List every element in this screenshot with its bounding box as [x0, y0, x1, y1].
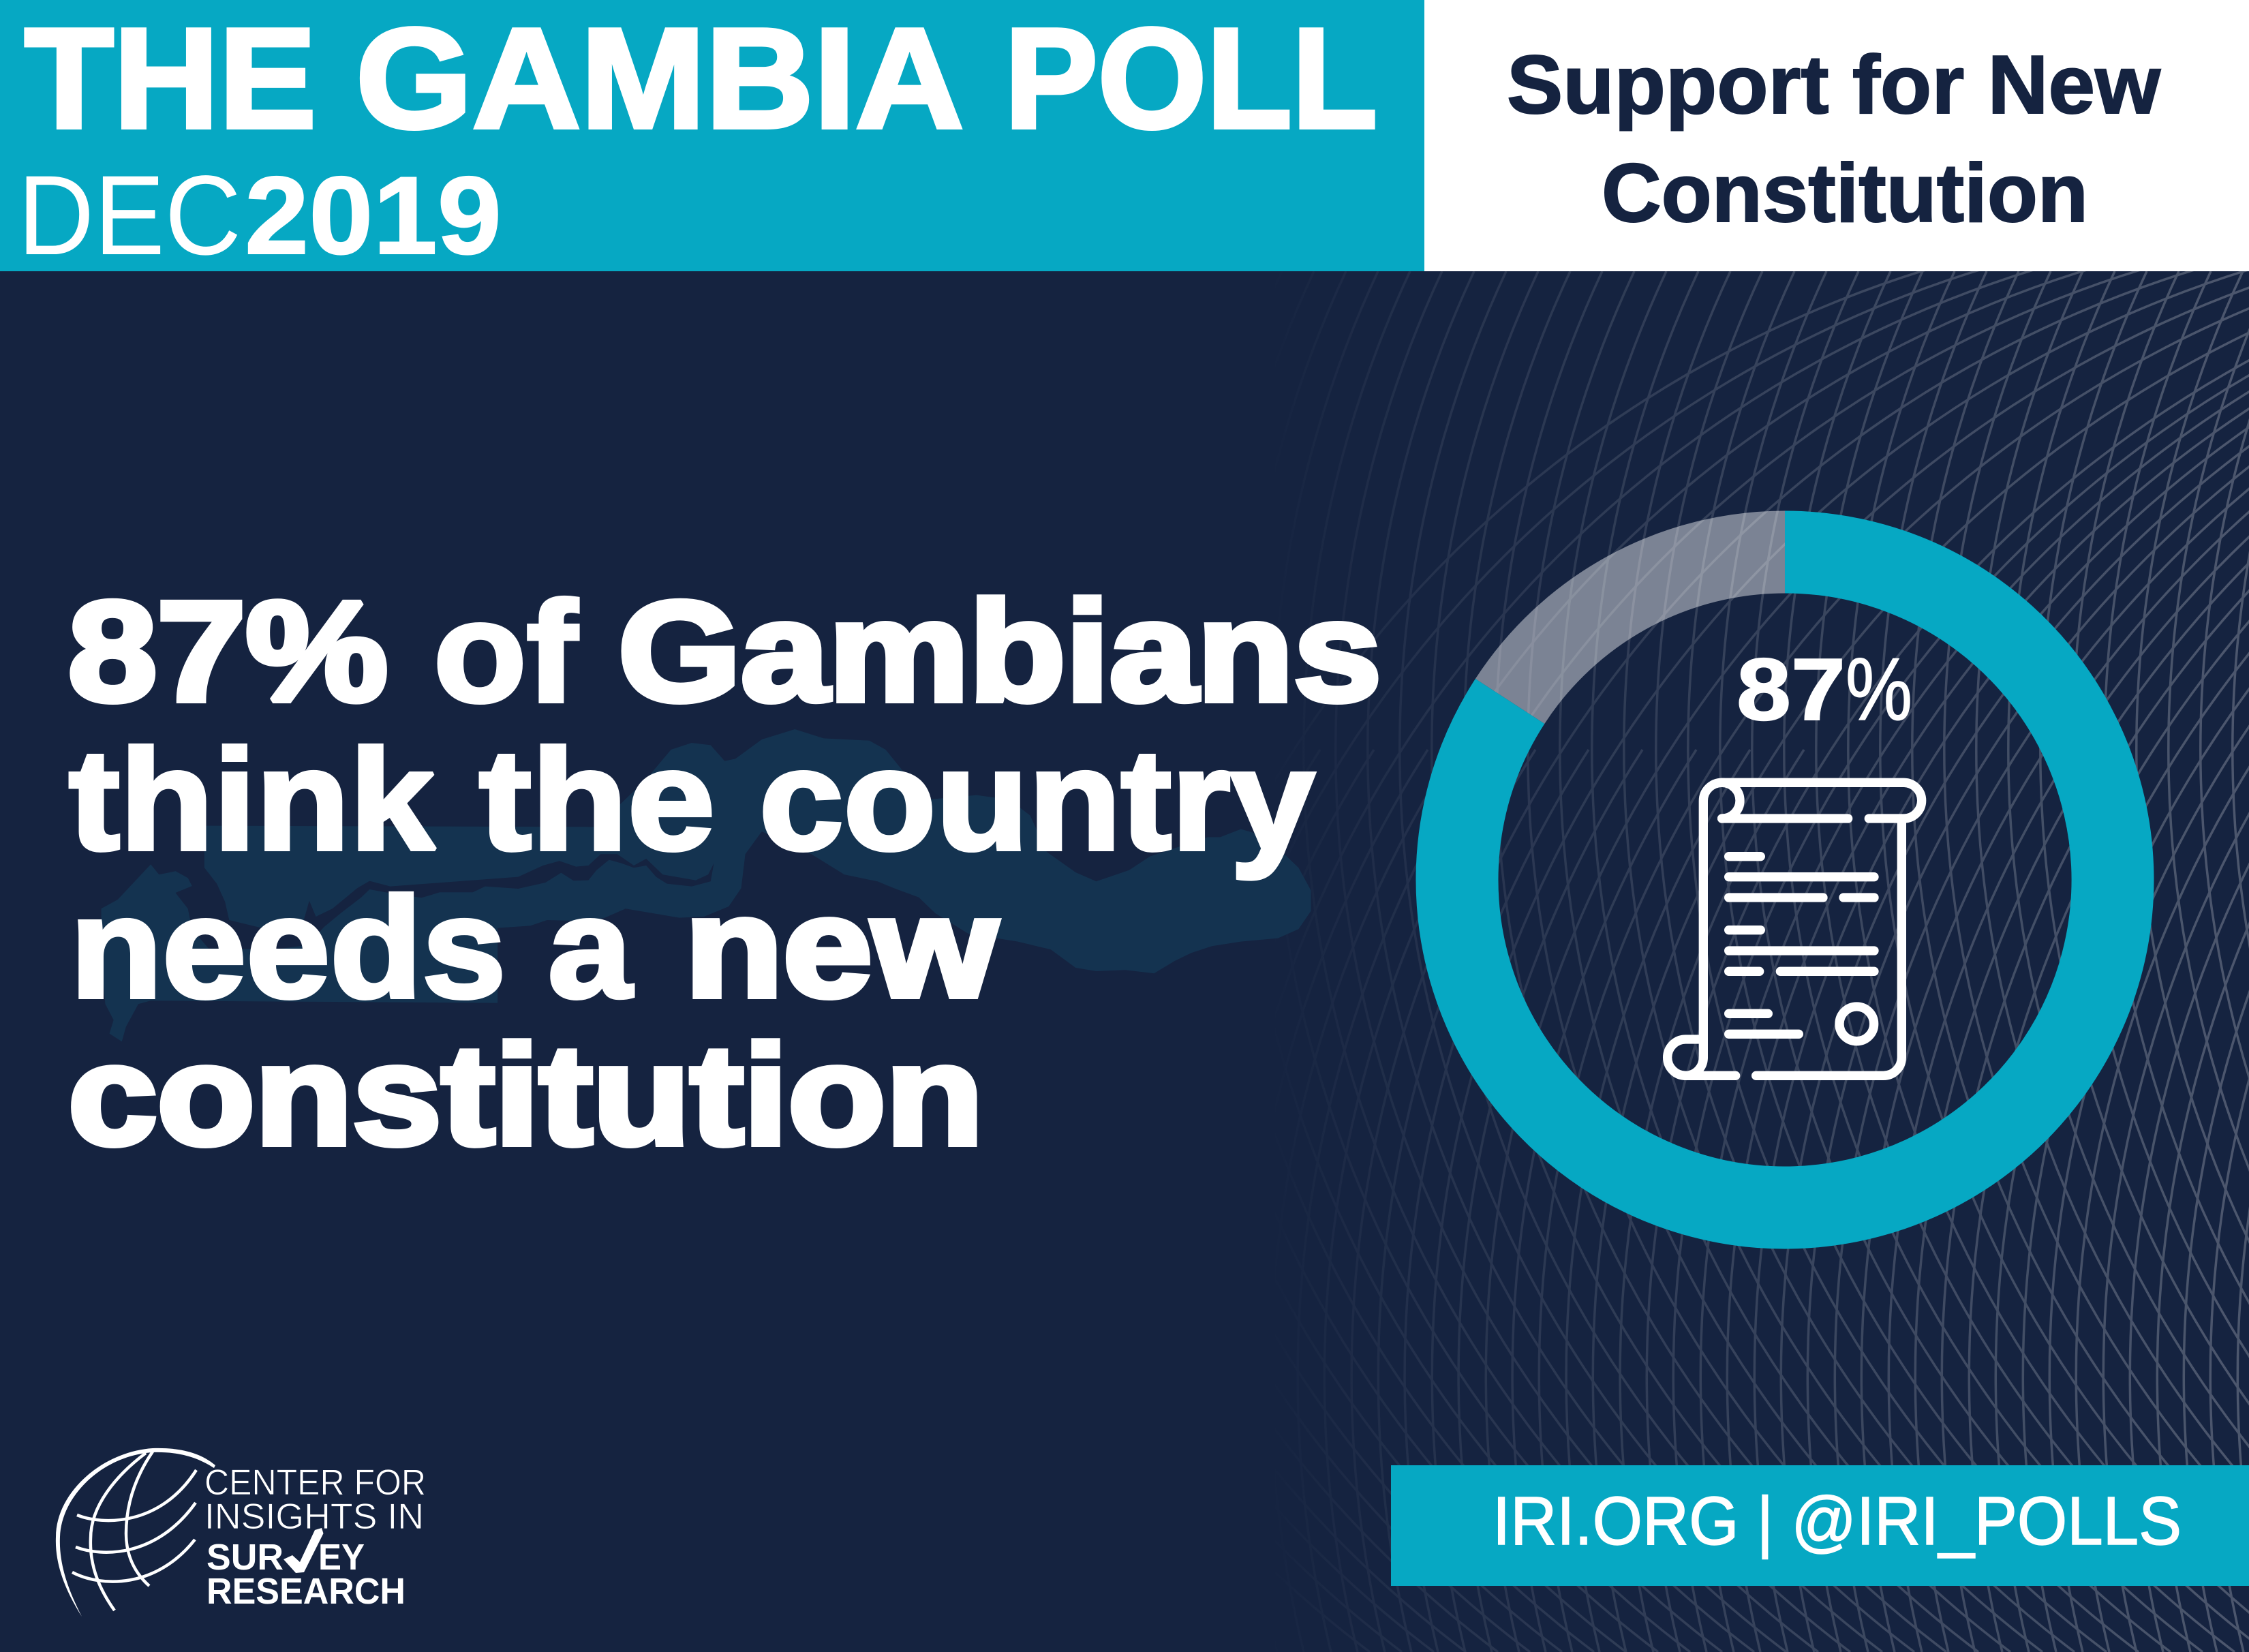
donut chart: 87%: [1457, 552, 2113, 1208]
donut 87% segment: [1457, 552, 2113, 1208]
topic heading: Support for New: [1507, 38, 2161, 131]
date: Dec 2019: [18, 153, 502, 279]
headline statement: constitution: [68, 1017, 983, 1175]
title: The Gambia Poll: THE: [25, 0, 316, 158]
header panel: topic: [1424, 0, 2249, 271]
map of The Gambia watermark: [101, 729, 1311, 1041]
footer text: IRI.ORG | @IRI_POLLS: [1493, 1483, 2182, 1559]
header band: poll title: [0, 0, 1424, 279]
logo wordmark: SUR: [206, 1537, 284, 1578]
donut value: 87%: 87: [1737, 641, 1846, 739]
logo wordmark: EY: [318, 1537, 365, 1578]
icon: globe: [56, 1448, 215, 1617]
topic heading: [1507, 38, 2161, 239]
headline statement: of: [433, 572, 578, 732]
logo wordmark: INSIGHTS IN: [204, 1497, 424, 1537]
headline statement: 87%: [68, 572, 388, 731]
headline statement: the: [479, 720, 715, 880]
date: Dec 2019: DEC: [18, 153, 241, 279]
title: The Gambia Poll: GAMBIA: [356, 0, 964, 158]
logo: Center for Insights in Survey Research: [56, 1448, 426, 1617]
icon: constitution scroll: [1668, 782, 1922, 1075]
logo wordmark: [204, 1463, 426, 1612]
headline statement: Gambians: [618, 572, 1381, 731]
title: The Gambia Poll: [25, 0, 1377, 158]
topic heading: Constitution: [1602, 147, 2088, 239]
donut value: 87%: [1737, 639, 1912, 739]
headline statement: country: [759, 720, 1315, 880]
headline statement: new: [685, 868, 998, 1026]
headline statement: [68, 572, 1381, 1175]
footer bar: links: [1391, 1465, 2249, 1586]
headline statement: think: [69, 720, 435, 880]
logo wordmark: CENTER FOR: [204, 1463, 426, 1503]
donut value: 87%: %: [1846, 639, 1912, 739]
headline statement: needs a: [70, 868, 633, 1028]
logo wordmark: RESEARCH: [206, 1571, 406, 1612]
title: The Gambia Poll: POLL: [1005, 0, 1377, 158]
date: Dec 2019: 2019: [245, 154, 502, 277]
donut remainder segment: [1510, 552, 1785, 701]
